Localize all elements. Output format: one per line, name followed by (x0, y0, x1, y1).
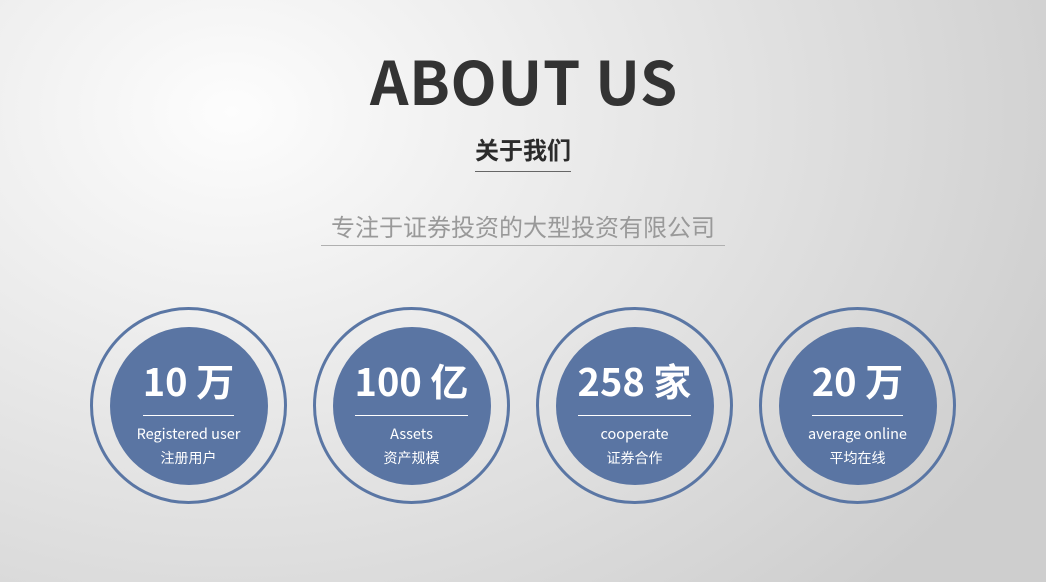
label: 注册用户: 注册用户 (160, 448, 216, 468)
label: Registered user: Registered user (137, 423, 240, 444)
label: cooperate: cooperate (600, 423, 669, 444)
value: 258 家: 258 家 (578, 352, 691, 407)
title: ABOUT US (370, 36, 678, 123)
stat: cooperate (536, 307, 733, 504)
value: 100 亿: 100 亿 (355, 352, 468, 407)
label: 平均在线: 平均在线 (830, 448, 886, 468)
label: 资产规模: 资产规模 (384, 448, 440, 468)
stat: assets (313, 307, 510, 504)
label: Assets: Assets (390, 423, 433, 444)
stat: registered users (90, 307, 287, 504)
label: 证券合作: 证券合作 (606, 448, 662, 468)
tagline: 专注于证券投资的大型投资有限公司 (331, 208, 715, 243)
stat: average online (759, 307, 956, 504)
label: average online: average online (808, 423, 907, 444)
subtitle: 关于我们 (475, 131, 571, 166)
value: 20 万: 20 万 (812, 352, 903, 407)
value: 10 万: 10 万 (143, 352, 234, 407)
